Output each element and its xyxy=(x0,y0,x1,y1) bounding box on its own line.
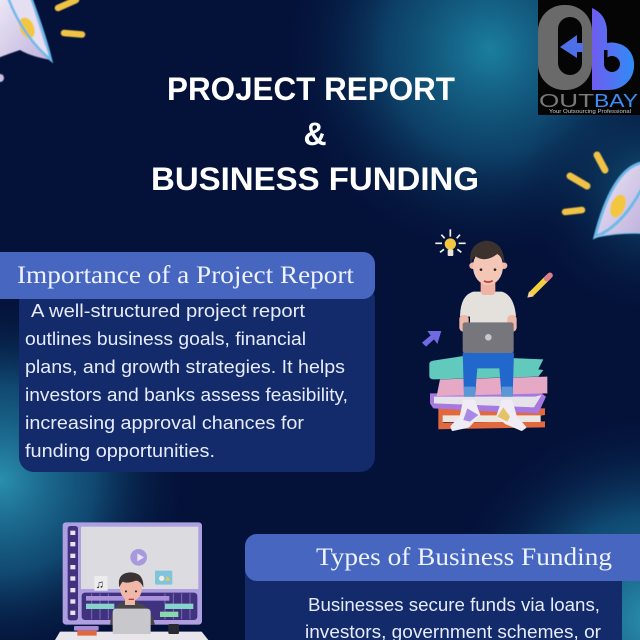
title: & xyxy=(303,116,327,152)
title: BUSINESS FUNDING xyxy=(151,161,479,197)
icons: music note and picture xyxy=(94,571,172,591)
icon: pencil xyxy=(527,275,550,298)
panel body xyxy=(245,570,622,640)
laptop xyxy=(463,322,514,353)
title: PROJECT REPORT xyxy=(167,71,455,107)
body text: outlines business goals, financial xyxy=(25,328,306,349)
icon: blue letter b xyxy=(592,8,634,90)
book stack xyxy=(429,356,547,429)
logo: OutBay: OUT xyxy=(539,90,594,111)
heading band: Importance of a Project Report xyxy=(17,262,354,289)
head xyxy=(469,241,507,295)
monitor xyxy=(63,522,202,625)
icon: megaphone top left xyxy=(0,0,82,82)
logo: OutBay: BAY xyxy=(594,90,638,111)
panel: types of business funding xyxy=(245,534,640,640)
torso and arms xyxy=(459,292,517,332)
timeline xyxy=(82,593,197,620)
heading band xyxy=(245,534,640,581)
person xyxy=(110,572,155,625)
icon: grey letter O with arrow xyxy=(538,5,592,90)
body text xyxy=(25,300,348,461)
logo: OutBay xyxy=(538,0,640,115)
heading band xyxy=(0,252,375,299)
books and mug xyxy=(74,624,179,636)
body text: funding opportunities. xyxy=(25,440,215,461)
body text: increasing approval chances for xyxy=(25,412,304,433)
body text: Businesses secure funds via loans, xyxy=(308,594,600,615)
legs and shoes xyxy=(451,353,525,430)
icons: music note and picture: ♫ xyxy=(96,579,104,591)
body text: investors and banks assess feasibility, xyxy=(25,384,348,405)
panel body xyxy=(19,285,375,472)
body text xyxy=(305,594,601,640)
heading band: Types of Business Funding xyxy=(316,544,613,571)
desk xyxy=(55,632,208,640)
body text: plans, and growth strategies. It helps xyxy=(25,356,345,377)
title xyxy=(151,71,479,197)
logo: OutBay: Your Outsourcing Professional xyxy=(549,109,631,115)
laptop xyxy=(113,609,151,634)
icon: light bulb xyxy=(435,229,466,256)
illustration: student with laptop on books xyxy=(422,229,550,430)
icon: arrow xyxy=(422,331,441,347)
panel: importance of a project report xyxy=(0,252,375,472)
icon: megaphone right xyxy=(565,155,640,237)
body text: A well-structured project report xyxy=(31,300,305,321)
illustration: video editor at desk xyxy=(55,522,208,640)
